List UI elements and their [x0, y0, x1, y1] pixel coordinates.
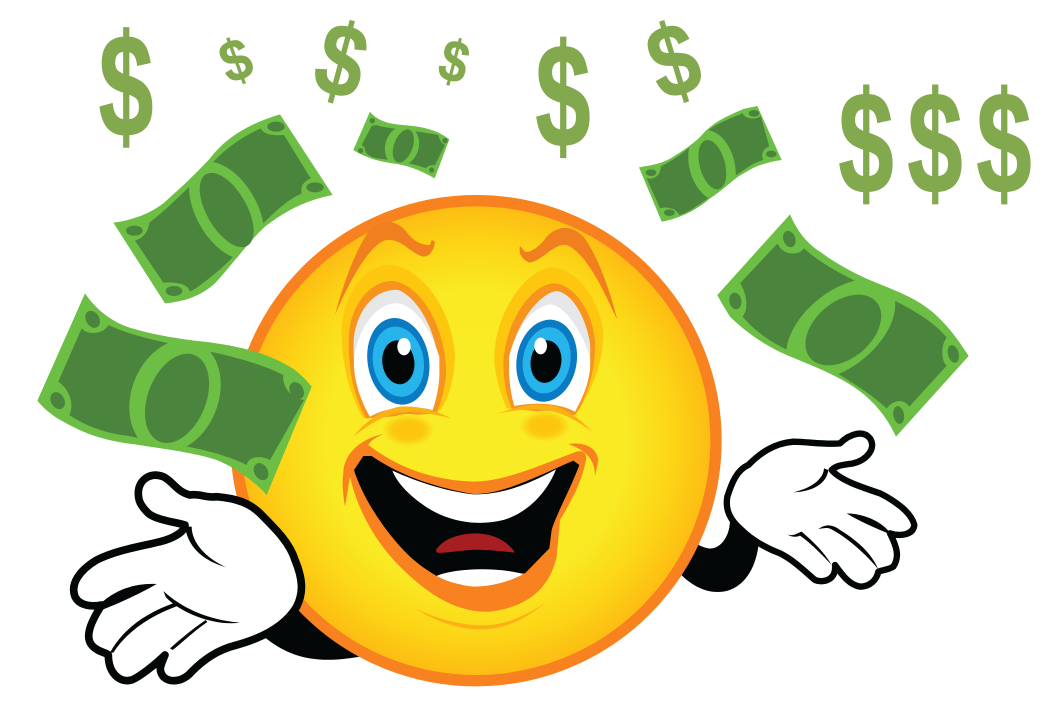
dollar signs: $ [303, 0, 379, 123]
left eyebrow [335, 222, 435, 315]
bill: left large [37, 293, 312, 495]
right eyebrow [520, 228, 617, 320]
dollar signs: $ [432, 25, 476, 97]
chin crease [415, 602, 547, 629]
mouth [343, 434, 598, 612]
dollar signs: $ [976, 63, 1032, 224]
right hand [727, 434, 914, 587]
dollar signs: $ [210, 24, 261, 96]
dollar signs: $ [635, 0, 713, 123]
under-eye folds [353, 405, 592, 437]
face [236, 201, 716, 681]
dollar signs: $ [838, 63, 894, 224]
right eye [494, 267, 603, 415]
sleeves [260, 520, 758, 660]
dollar signs: $ [907, 63, 963, 224]
bill: right large [717, 214, 969, 437]
dollar signs [99, 0, 1032, 224]
bill: upper left [113, 114, 333, 303]
bill: upper right [639, 106, 782, 222]
left hand [74, 475, 301, 681]
left eye [341, 265, 455, 418]
bill: small top [353, 112, 449, 178]
dollar signs: $ [535, 14, 591, 178]
face disc [236, 201, 716, 681]
cheeks [382, 411, 570, 446]
dollar signs: $ [99, 5, 153, 168]
